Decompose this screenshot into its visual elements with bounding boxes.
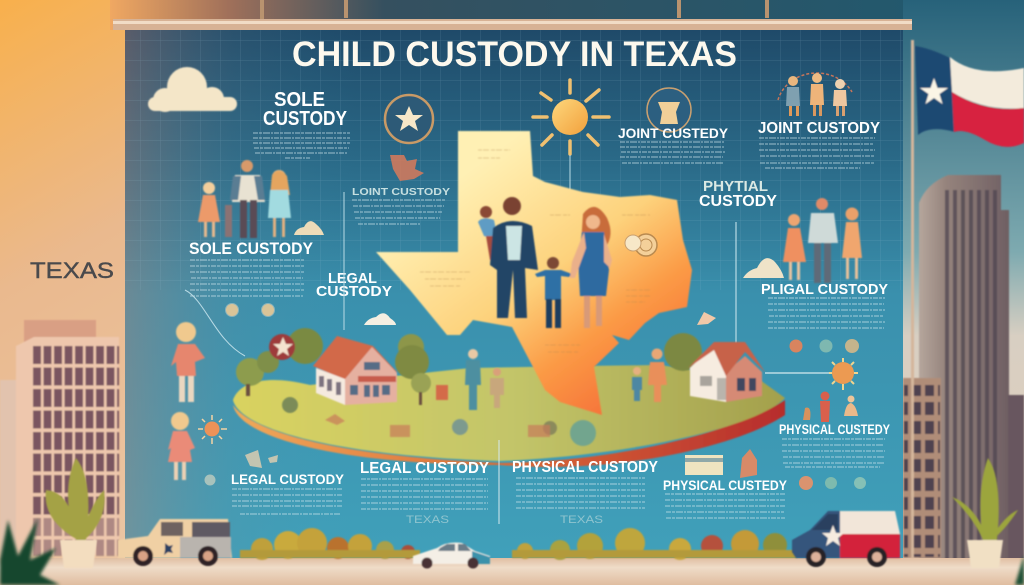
figure: toddler on arm [478, 206, 498, 260]
icon: star flag tree [269, 334, 295, 360]
heading: joint custody right: JOINT CUSTODY [758, 120, 881, 137]
figure: lower [168, 412, 195, 480]
icons: left medallions and sun [198, 304, 278, 486]
figure: boy [535, 257, 572, 328]
plant: dark palm corner [0, 518, 1024, 585]
label: Texas small left: TEXAS [406, 514, 449, 526]
building: left skyline [0, 320, 119, 560]
leader line right [735, 222, 737, 345]
heading: legal custody upper: LEGAL [328, 270, 377, 287]
title: CHILD CUSTODY IN TEXAS [292, 35, 737, 74]
house: right [688, 342, 765, 402]
text block: sole custody top [253, 133, 350, 158]
heading: legal custody left: LEGAL CUSTODY [231, 471, 345, 487]
icon: cloud top left [148, 67, 237, 112]
heading: physical custody split: CUSTODY [699, 193, 778, 210]
panel: infographic board [125, 30, 903, 560]
icons: bottom medallions [799, 476, 866, 490]
icon: small orange emblem [390, 155, 424, 181]
island land [233, 365, 785, 461]
bushes [240, 528, 797, 560]
figure: right [842, 208, 862, 279]
vehicle: small car [413, 543, 490, 568]
icon: cloud right [743, 258, 784, 278]
figure: mother [268, 170, 291, 237]
main family [478, 197, 612, 328]
trees [236, 328, 702, 446]
heading: legal custody upper [316, 270, 392, 300]
heading: joint custody left: LOINT CUSTODY [352, 186, 450, 198]
map notes [420, 150, 650, 352]
plant: left pot [46, 458, 105, 568]
flag: Texas [911, 40, 1024, 560]
heading: sole custody top [263, 89, 348, 130]
family: sole custody figures [198, 160, 291, 238]
figure: mother [570, 207, 612, 328]
heading: physical custody split: PHYTIAL [703, 178, 768, 195]
heading: physical custody right: PHYSICAL CUSTEDY [779, 422, 890, 437]
text block: physical custody lower right [665, 494, 785, 518]
heading: physical custody center: PHYSICAL CUSTODY [512, 459, 659, 476]
heading: sole custody: SOLE CUSTODY [189, 239, 314, 258]
island base [233, 365, 785, 467]
text block: joint custody right [759, 138, 875, 168]
text block: sole custody [190, 260, 305, 296]
island rim [233, 400, 785, 467]
rail and hangers [113, 0, 912, 30]
island decorations [236, 328, 765, 446]
map: Texas [376, 131, 692, 415]
ground details [325, 414, 550, 437]
heading: sole custody top: CUSTODY [263, 108, 348, 130]
house: left [313, 336, 397, 405]
figures: small family right [803, 392, 858, 422]
icon: star badge [385, 95, 433, 143]
icon: card and document [685, 449, 757, 478]
figures: two left characters [168, 322, 205, 480]
icon: joint custody badge [647, 88, 691, 132]
heading: physical custody split [699, 178, 778, 210]
family: right figures [783, 198, 862, 283]
figure: left [783, 214, 806, 280]
text block: joint custody left [352, 200, 445, 224]
family: joint custody top [778, 73, 852, 116]
heading: pligal custody: PLIGAL CUSTODY [761, 281, 888, 298]
vehicle: Texas van [792, 511, 900, 567]
icon: sun right with line [765, 358, 858, 390]
icon: medallions right [790, 339, 859, 353]
figure: upper [171, 322, 205, 402]
heading: physical custody lower right: PHYSICAL CUSTEDY [663, 477, 788, 493]
ground ledge [0, 558, 1024, 585]
heading: legal custody upper: CUSTODY [316, 283, 392, 300]
icon: sun [533, 80, 609, 190]
label: Texas wall text: TEXAS [30, 258, 114, 283]
text block: legal custody left [232, 489, 343, 514]
text block: physical custody right [782, 439, 885, 467]
leader line [185, 192, 344, 356]
text block: pligal custody [768, 298, 885, 328]
label: Texas small right: TEXAS [560, 514, 603, 526]
text block: joint custody center [620, 142, 725, 163]
figure: child [198, 182, 220, 237]
figure: father [808, 198, 838, 283]
plant: right pot [952, 458, 1018, 568]
heading: legal custody center: LEGAL CUSTODY [360, 460, 489, 477]
icon: clouds and small star on map side [364, 312, 716, 325]
people on island [436, 348, 667, 410]
vehicle: left truck [118, 519, 232, 566]
text block: legal custody center [361, 479, 488, 509]
heading: sole custody top: SOLE [274, 89, 325, 111]
figure: father [490, 197, 538, 318]
heading: joint custody center: JOINT CUSTEDY [618, 125, 729, 141]
figure: father [230, 160, 265, 238]
building: right tower [903, 175, 1024, 560]
icons: map emblem coins [625, 234, 657, 256]
text block: physical custody center [516, 478, 645, 508]
icon: small cloud [294, 221, 324, 235]
leader line center [498, 440, 500, 524]
